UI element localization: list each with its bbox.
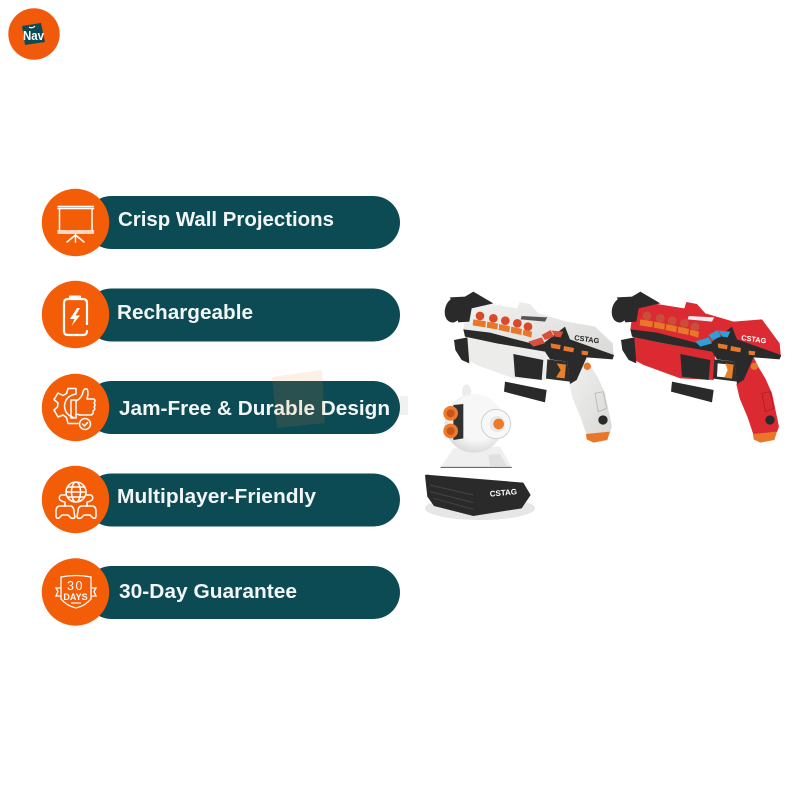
projector target unit xyxy=(425,384,535,520)
white laser tag gun: CSTAG xyxy=(574,333,600,346)
red laser tag gun xyxy=(609,292,781,443)
gun grip xyxy=(569,357,612,435)
feature row: Rechargeable xyxy=(42,281,400,348)
lights xyxy=(640,312,758,370)
feature row: Jam-Free & Durable Design xyxy=(42,374,400,441)
watermark xyxy=(272,370,408,428)
label: Crisp Wall Projections: Crisp Wall Projections xyxy=(118,209,334,231)
icon: gear with thumbs up xyxy=(54,388,95,430)
label: Jam-Free & Durable Design: Jam-Free & Durable Design xyxy=(119,398,390,420)
projector sphere xyxy=(445,394,503,453)
projector target unit: CSTAG xyxy=(489,487,517,499)
red laser tag gun: CSTAG xyxy=(741,333,767,346)
label: Multiplayer-Friendly: Multiplayer-Friendly xyxy=(117,486,317,508)
gun body xyxy=(630,302,781,357)
icon: battery with bolt xyxy=(64,296,87,335)
projector stand xyxy=(441,447,512,467)
gun grip xyxy=(736,357,779,435)
icon: 30 days badge: 30 xyxy=(67,579,84,593)
icon: 30 days badge: DAYS xyxy=(63,592,88,602)
barrels xyxy=(617,292,660,322)
logo badge xyxy=(8,8,60,60)
white laser tag gun xyxy=(442,292,614,443)
label: Rechargeable: Rechargeable xyxy=(117,302,253,324)
trigger xyxy=(713,359,737,382)
logo badge: Nav xyxy=(23,29,44,43)
feature row: Multiplayer-Friendly xyxy=(42,466,400,533)
base shadow xyxy=(425,497,535,520)
icon: projection screen xyxy=(58,206,94,242)
icon: globe and game controllers xyxy=(56,482,96,518)
feature row: Crisp Wall Projections xyxy=(42,189,400,256)
barrels xyxy=(450,292,493,322)
feature row: 30-Day Guarantee xyxy=(42,558,400,626)
magazines xyxy=(513,354,543,380)
label: 30-Day Guarantee: 30-Day Guarantee xyxy=(119,581,297,603)
magazines xyxy=(680,354,710,380)
orange lights xyxy=(473,312,591,370)
trigger xyxy=(546,359,570,382)
gun body xyxy=(463,302,614,357)
battery base xyxy=(425,475,531,516)
icon: 30 days badge xyxy=(56,576,96,608)
